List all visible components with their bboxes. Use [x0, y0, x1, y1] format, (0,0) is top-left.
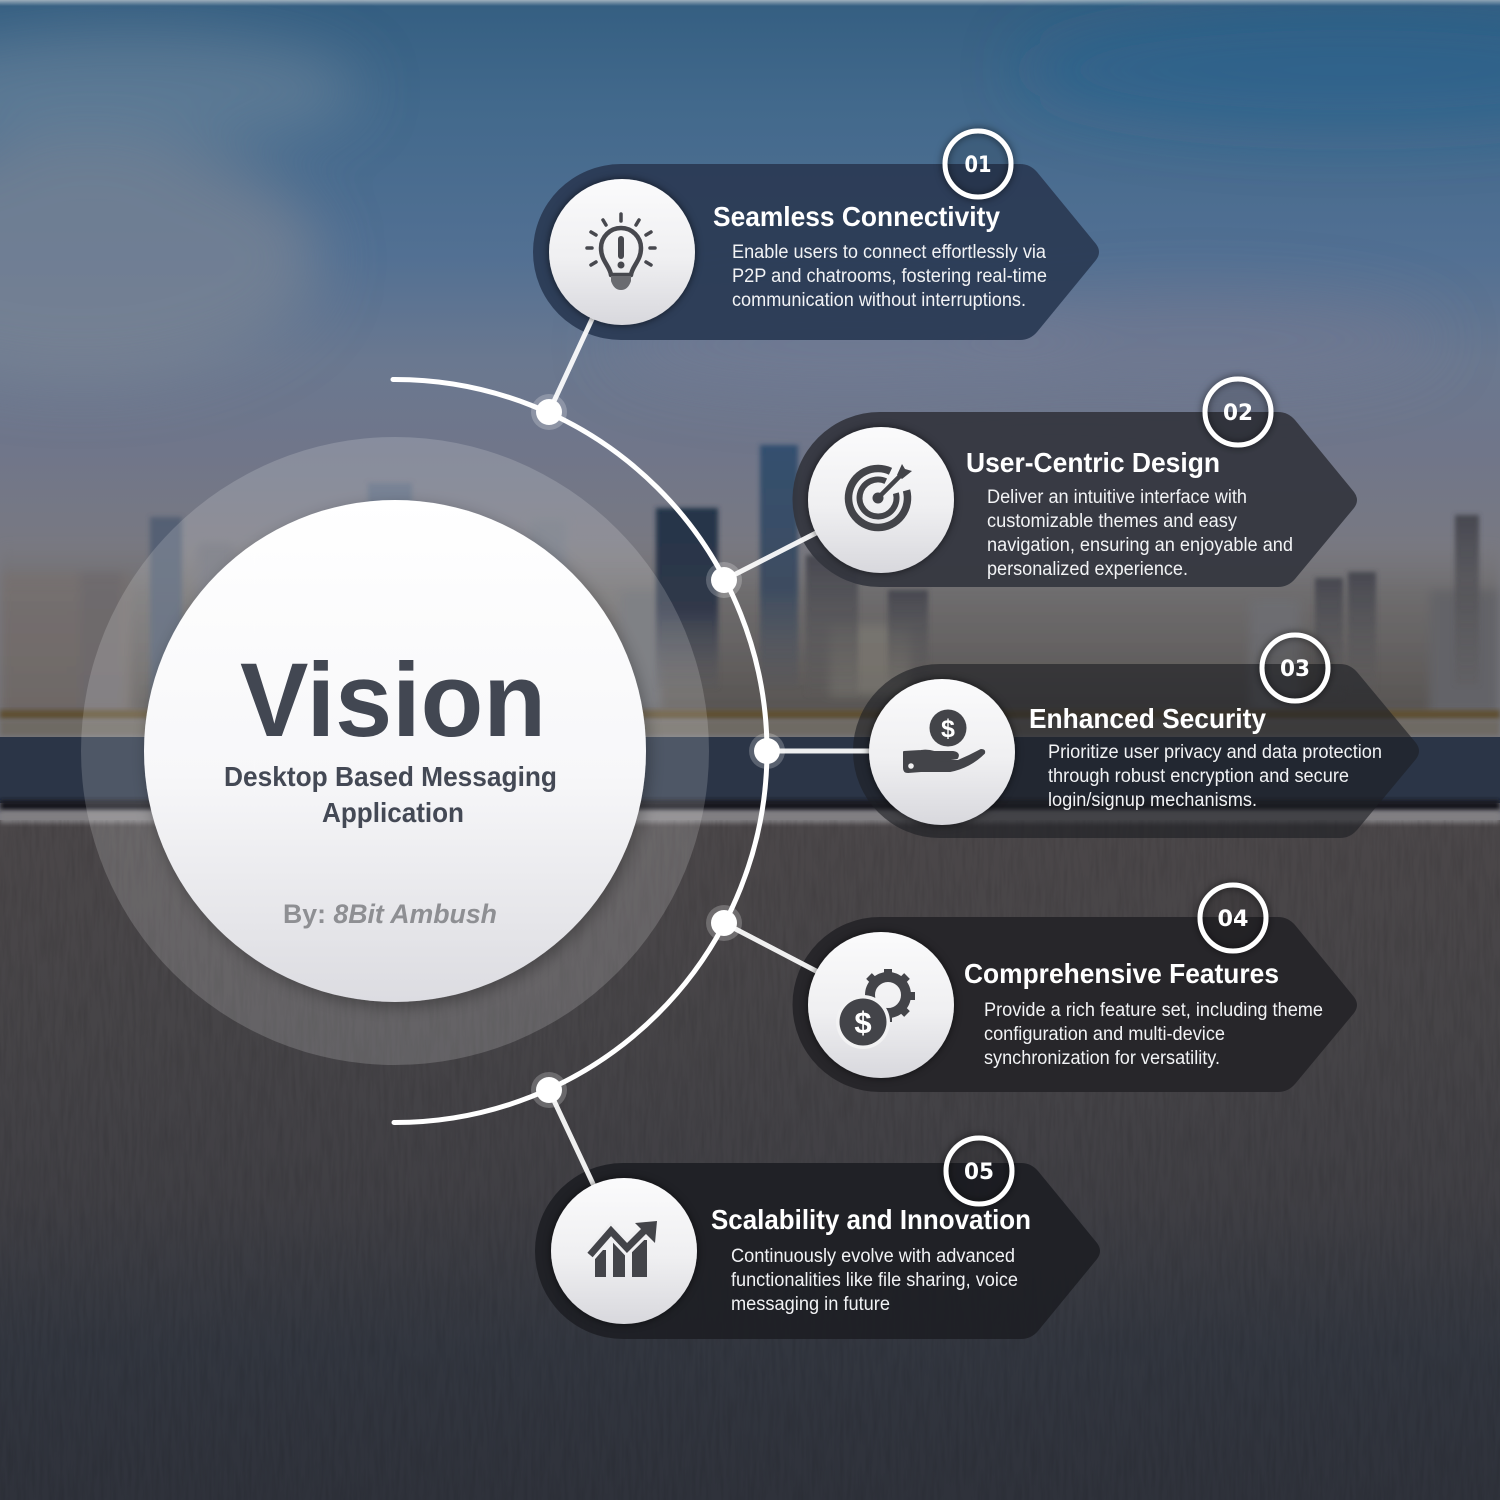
icon: gear and coin: $ [854, 1005, 872, 1040]
description 04 [984, 1000, 1323, 1069]
number badge 02: 02 [1223, 401, 1253, 426]
panel 04: Comprehensive Features [793, 885, 1357, 1092]
description 02: navigation, ensuring an enjoyable and [987, 535, 1293, 556]
number badge 01 [945, 131, 1011, 197]
title: Vision [240, 642, 546, 759]
description 01 [732, 242, 1047, 311]
number badge 04 [1200, 885, 1266, 951]
description 03: through robust encryption and secure [1048, 766, 1349, 787]
heading 04: Comprehensive Features [964, 958, 1279, 989]
description 05: functionalities like file sharing, voice [731, 1270, 1018, 1291]
subtitle: Application [322, 797, 464, 828]
number badge 03: 03 [1280, 657, 1310, 682]
panel 04 arrow shape [793, 917, 1357, 1092]
outer translucent ring [81, 437, 709, 1065]
description 02: Deliver an intuitive interface with [987, 487, 1247, 508]
heading 03: Enhanced Security [1029, 703, 1266, 734]
description 04: synchronization for versatility. [984, 1048, 1220, 1069]
description 01: P2P and chatrooms, fostering real-time [732, 266, 1047, 287]
icon: gear and coin [808, 932, 954, 1078]
description 01: communication without interruptions. [732, 290, 1026, 311]
description 03: login/signup mechanisms. [1048, 790, 1257, 811]
number badge 03 [1262, 635, 1328, 701]
number badge 05: 05 [964, 1160, 994, 1185]
panel 02: User-Centric Design [793, 379, 1357, 587]
arc nodes [531, 394, 785, 1108]
subtitle [224, 761, 557, 828]
panel 05 arrow shape [535, 1163, 1100, 1339]
number badge 04: 04 [1218, 907, 1248, 932]
panel 03: Enhanced Security [853, 635, 1419, 838]
author credit: By: 8Bit Ambush [283, 899, 497, 929]
number badge 02 [1205, 379, 1271, 445]
number badge 01: 01 [964, 153, 992, 178]
icon: hand holding coin [869, 679, 1015, 825]
description 05: Continuously evolve with advanced [731, 1246, 1015, 1267]
icon: rising chart [551, 1178, 697, 1324]
description 01: Enable users to connect effortlessly via [732, 242, 1046, 263]
description 02 [987, 487, 1293, 580]
heading 01: Seamless Connectivity [713, 201, 1000, 232]
description 03: Prioritize user privacy and data protection [1048, 742, 1382, 763]
panel 02 arrow shape [793, 412, 1357, 587]
panel 01: Seamless Connectivity [533, 131, 1099, 340]
panel 05: Scalability and Innovation [535, 1138, 1100, 1339]
number badge 05 [946, 1138, 1012, 1204]
description 04: Provide a rich feature set, including theme [984, 1000, 1323, 1021]
description 04: configuration and multi-device [984, 1024, 1225, 1045]
description 03 [1048, 742, 1382, 811]
heading 05: Scalability and Innovation [711, 1204, 1031, 1235]
description 02: customizable themes and easy [987, 511, 1237, 532]
icon: target [808, 427, 954, 573]
connecting arc [393, 379, 767, 1123]
icon: light bulb [549, 179, 695, 325]
icon: hand holding coin: $ [941, 715, 955, 743]
heading 02: User-Centric Design [966, 447, 1220, 478]
subtitle: Desktop Based Messaging [224, 761, 557, 792]
panel 01 arrow shape [533, 164, 1099, 340]
connector lines [549, 317, 872, 1186]
central disc [144, 500, 646, 1002]
panel 03 arrow shape [853, 664, 1419, 838]
description 05 [731, 1246, 1018, 1315]
description 05: messaging in future [731, 1294, 890, 1315]
description 02: personalized experience. [987, 559, 1188, 580]
